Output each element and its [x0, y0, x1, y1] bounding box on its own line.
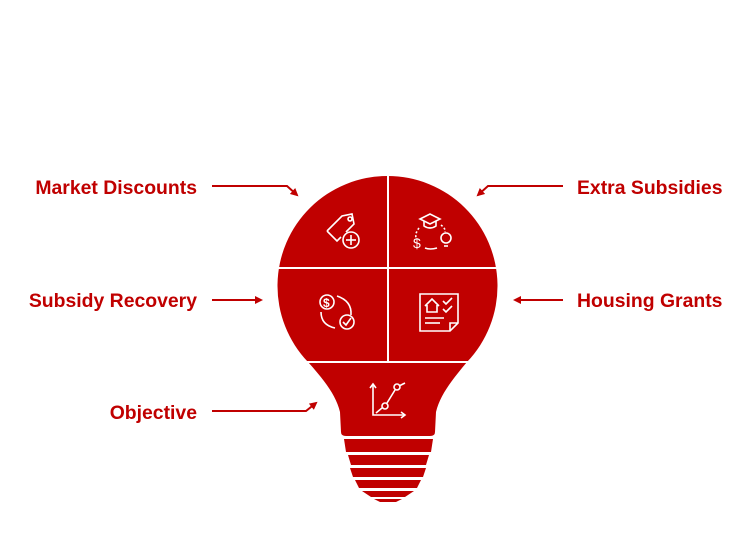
bulb [276, 170, 500, 502]
arrow: market discounts [212, 186, 297, 195]
arrow: subsidy recovery [212, 299, 261, 301]
icon: dollar cycle check [320, 295, 354, 329]
label: Objective: Objective [110, 402, 197, 424]
label: Housing Grants: Housing Grants [577, 290, 722, 312]
arrow: housing grants [515, 299, 563, 301]
icon: graduation cycle [413, 214, 451, 251]
icon: graduation cycle: $ [413, 235, 421, 251]
label: Extra Subsidies: Extra Subsidies [577, 177, 722, 199]
arrow: extra subsidies [478, 186, 563, 195]
icon: housing document [420, 294, 458, 331]
icon: chart [370, 383, 405, 418]
arrow: objective [212, 403, 316, 411]
label: Market Discounts: Market Discounts [35, 177, 197, 199]
icon: dollar cycle check: $ [323, 296, 330, 310]
label: Subsidy Recovery: Subsidy Recovery [29, 290, 197, 312]
icon: tag plus [327, 214, 359, 248]
